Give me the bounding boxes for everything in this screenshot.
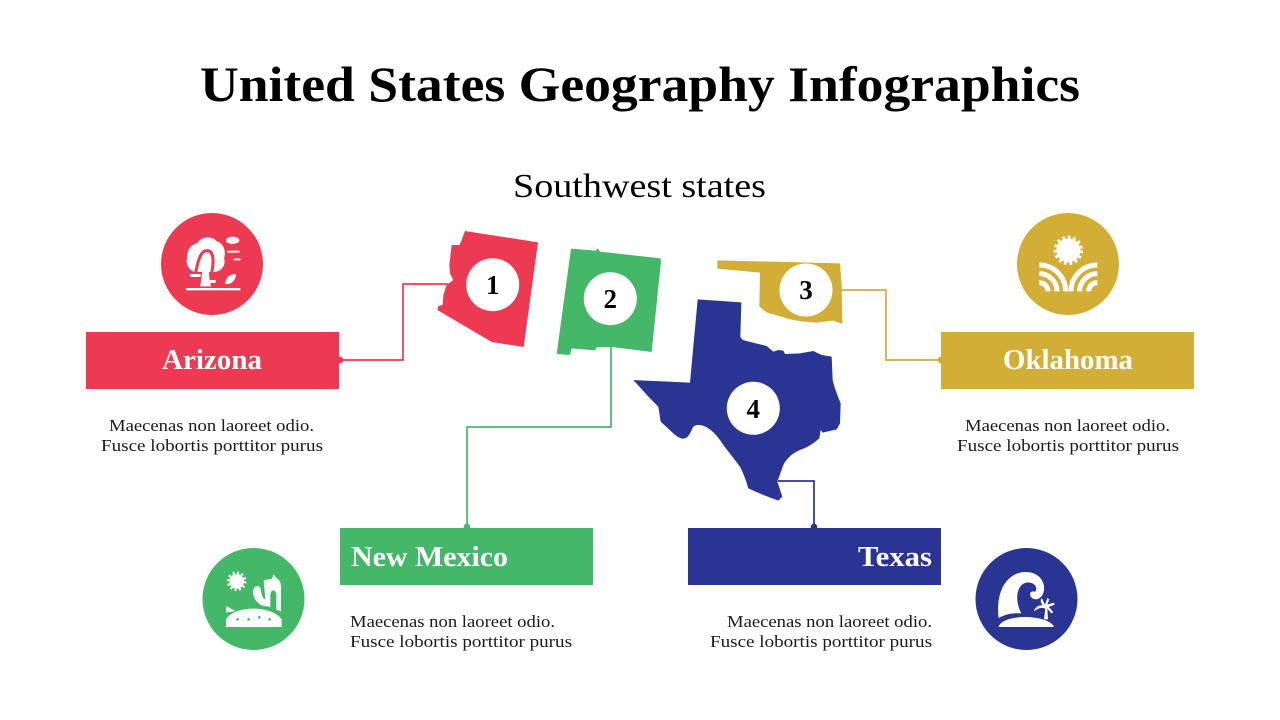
panel: Oklahoma xyxy=(941,213,1194,455)
panel: Arizona xyxy=(86,213,339,455)
label: New Mexico: New Mexico xyxy=(351,542,508,573)
text: Arizona description xyxy=(101,416,323,455)
title: United States Geography Infographics xyxy=(200,56,1080,112)
icon: tree rock xyxy=(161,213,263,315)
label: Oklahoma xyxy=(941,332,1194,389)
connector: Oklahoma xyxy=(841,290,944,362)
panel: New Mexico xyxy=(202,528,593,651)
text: New Mexico description: Fusce lobortis porttitor purus xyxy=(350,632,572,651)
map state: Texas xyxy=(633,299,841,501)
label: Texas: Texas xyxy=(858,542,932,573)
text: Arizona description: Maecenas non laoreet odio. xyxy=(109,416,314,435)
map state: Oklahoma xyxy=(717,260,842,324)
icon: sun over fields xyxy=(1017,213,1119,315)
map state: New Mexico xyxy=(557,248,661,355)
text: Texas description: Fusce lobortis porttitor purus xyxy=(710,632,932,651)
icon: wave and palm xyxy=(976,548,1078,650)
connector: Texas xyxy=(778,481,816,530)
label: Texas xyxy=(688,528,941,585)
icon: desert cactus xyxy=(202,548,304,650)
text: Oklahoma description: Maecenas non laoreet odio. xyxy=(965,416,1170,435)
label: Arizona: Arizona xyxy=(162,345,262,376)
connector: New Mexico xyxy=(464,346,611,530)
panel: Texas xyxy=(688,528,1078,651)
map state: Arizona xyxy=(437,231,538,347)
text: Texas description xyxy=(710,612,932,651)
subtitle: Southwest states xyxy=(513,168,766,205)
label: Oklahoma: Oklahoma xyxy=(1003,345,1133,376)
text: Oklahoma description xyxy=(957,416,1179,455)
map state: Arizona: 1 xyxy=(486,270,499,300)
text: Texas description: Maecenas non laoreet odio. xyxy=(727,612,932,631)
text: Oklahoma description: Fusce lobortis porttitor purus xyxy=(957,436,1179,455)
map state: Texas: 4 xyxy=(747,394,760,424)
map state: New Mexico: 2 xyxy=(604,284,617,314)
map state: Oklahoma: 3 xyxy=(799,275,813,305)
text: New Mexico description: Maecenas non laoreet odio. xyxy=(350,612,555,631)
label: New Mexico xyxy=(340,528,593,585)
label: Arizona xyxy=(86,332,339,389)
text: New Mexico description xyxy=(350,612,572,651)
text: Arizona description: Fusce lobortis porttitor purus xyxy=(101,436,323,455)
connector: Arizona xyxy=(338,284,448,362)
